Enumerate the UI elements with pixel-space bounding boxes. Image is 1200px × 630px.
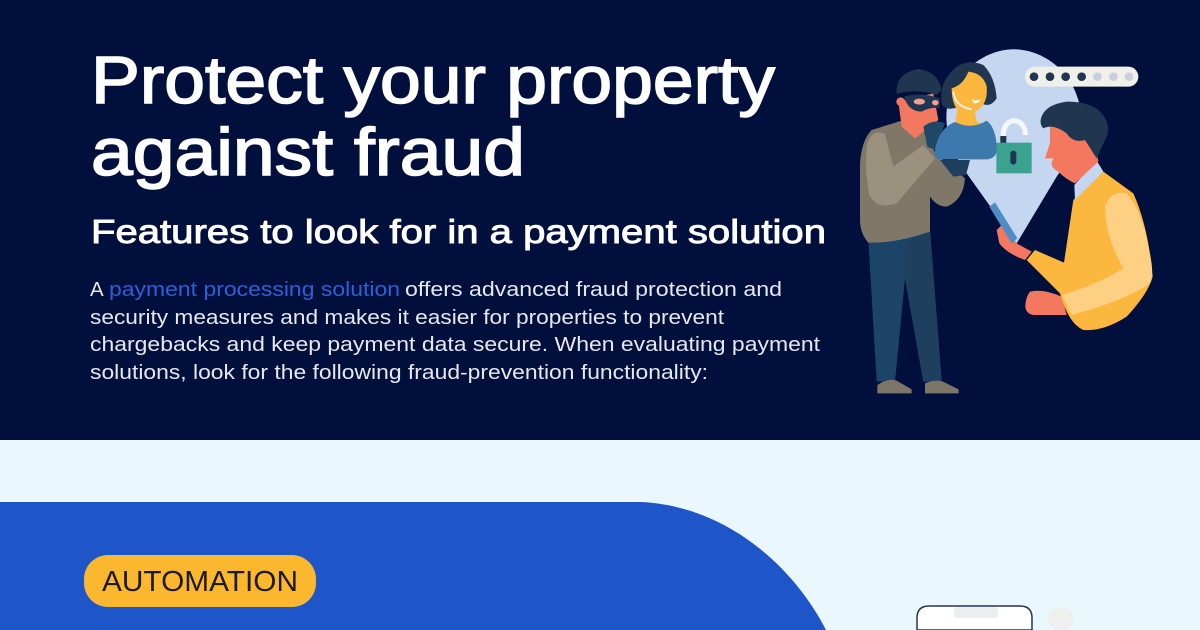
badge: automation: AUTOMATION (102, 566, 298, 598)
phone illustration top (917, 606, 1074, 630)
password field (1025, 67, 1138, 87)
sleeve highlight (1062, 193, 1152, 315)
intro text: security measures and makes it easier for properties to prevent (90, 306, 724, 329)
intro text: offers advanced fraud protection and (405, 278, 782, 301)
shoes (877, 380, 912, 393)
intro text: payment processing solution (109, 278, 400, 301)
collar (1074, 161, 1103, 200)
illustration: fraudster, agent and customer (860, 49, 1153, 393)
customer service mask (934, 62, 997, 159)
panel: automation (0, 502, 826, 630)
intro text: chargebacks and keep payment data secure. When evaluating payment (90, 333, 820, 356)
icon: open padlock (996, 121, 1032, 173)
icon: location pin (946, 49, 1080, 243)
vest (1027, 172, 1153, 330)
title: against fraud (91, 115, 525, 190)
phone hand (997, 225, 1032, 260)
intro text: A (90, 278, 104, 301)
head (1045, 127, 1098, 183)
panel: dark header (0, 0, 1200, 440)
sweater (860, 121, 965, 243)
neck and head (898, 93, 938, 138)
gloved hands (923, 121, 945, 150)
far hand (1025, 291, 1067, 315)
intro text (90, 278, 820, 384)
blue section shape (0, 502, 826, 630)
title: Protect your property (91, 43, 776, 118)
badge: automation (84, 555, 316, 607)
hair (1041, 102, 1108, 158)
phone (989, 202, 1017, 243)
title (91, 43, 776, 190)
intro text: solutions, look for the following fraud-prevention functionality: (90, 361, 708, 384)
legs (868, 230, 942, 382)
fraudster figure (860, 69, 970, 393)
customer with phone (989, 102, 1153, 330)
subtitle: Features to look for in a payment solution (91, 213, 826, 250)
